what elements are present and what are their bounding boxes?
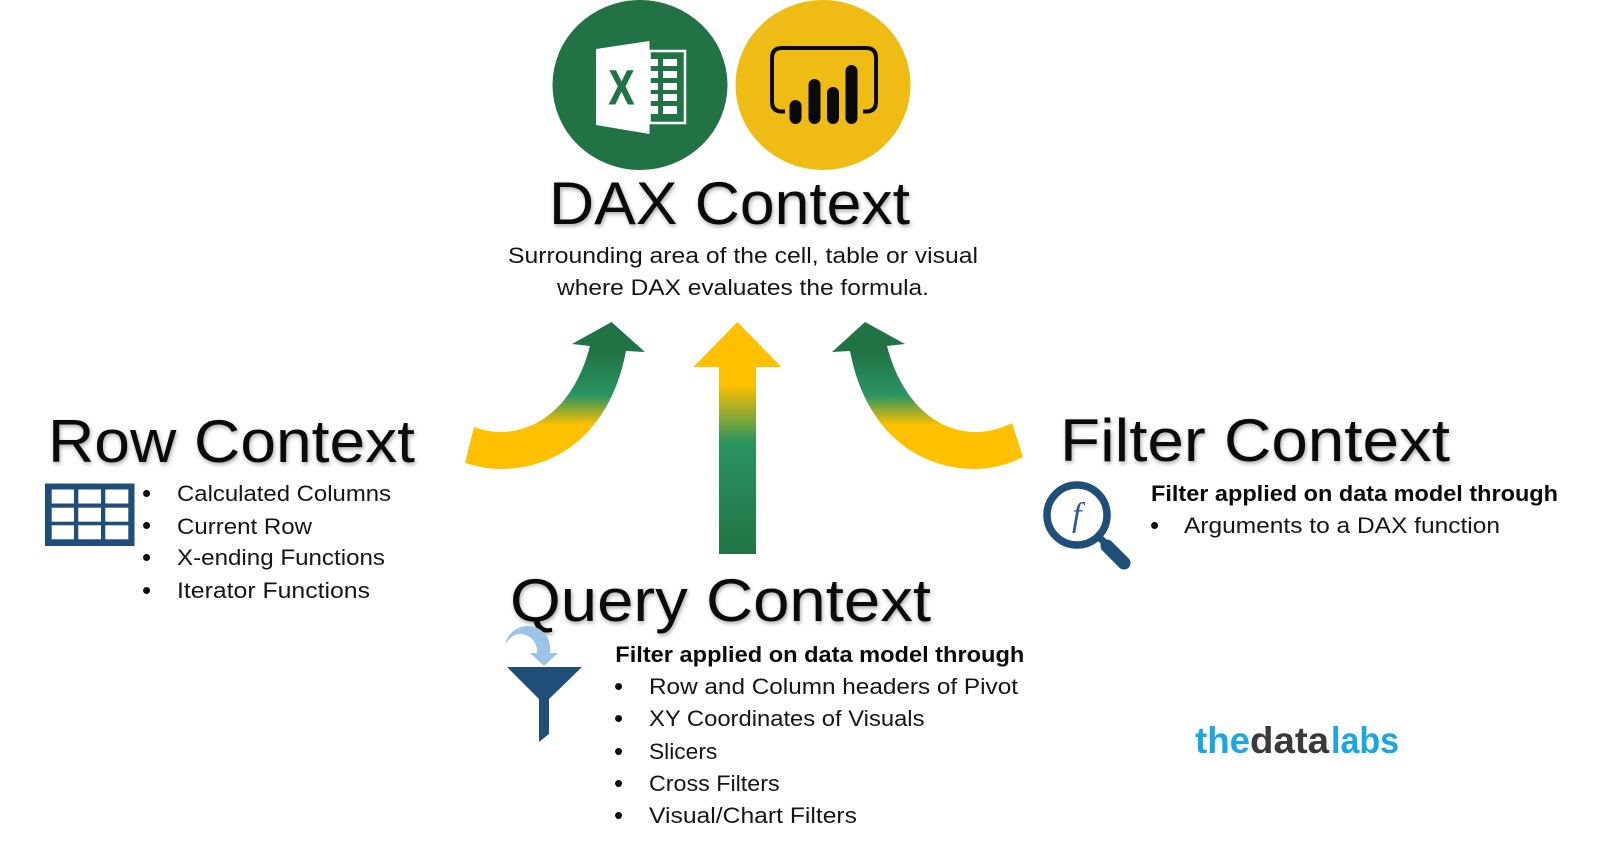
text block: filter context: [1150, 481, 1558, 540]
bullet list: row context: •: [142, 575, 151, 605]
logo: thedatalabs: labs: [1331, 720, 1399, 761]
icon: magnifier with function symbol: f: [1072, 497, 1086, 534]
text block: query context: Filter applied on data model through: [615, 642, 1024, 667]
text block: query context: •: [614, 671, 623, 701]
text block: query context: •: [614, 768, 623, 798]
icon: table: [45, 484, 134, 546]
arrow: query context to DAX context: [693, 322, 781, 554]
bullet list: row context: [142, 478, 391, 605]
text block: filter context: Arguments to a DAX function: [1184, 513, 1500, 538]
text block: query context: XY Coordinates of Visuals: [649, 706, 924, 731]
arrow: filter context to DAX context: [832, 322, 1023, 469]
text block: filter context: Filter applied on data model through: [1151, 481, 1558, 506]
bullet list: row context: •: [142, 478, 151, 508]
bullet list: row context: Iterator Functions: [177, 578, 370, 603]
text block: filter context: •: [1150, 510, 1159, 540]
icon: magnifier with function symbol: [1047, 485, 1124, 563]
logo: thedatalabs: the: [1195, 720, 1250, 761]
bullet list: row context: •: [142, 542, 151, 572]
panel: query context: [505, 567, 1024, 830]
definition text: where DAX evaluates the formula.: [556, 275, 929, 300]
text block: query context: Visual/Chart Filters: [649, 803, 857, 828]
panel: row context: [45, 408, 415, 605]
definition text: [508, 243, 978, 300]
heading: row context: Row Context: [48, 408, 415, 475]
icon: funnel with arrow: [505, 626, 582, 742]
text block: query context: Slicers: [649, 739, 717, 764]
arrow: row context to DAX context: [465, 322, 645, 469]
text block: query context: [614, 642, 1024, 830]
icon: Excel logo: X: [609, 62, 634, 115]
panel: filter context: [1047, 407, 1558, 563]
definition text: Surrounding area of the cell, table or visual: [508, 243, 978, 268]
text block: query context: Row and Column headers of Pivot: [649, 674, 1018, 699]
text block: query context: •: [614, 703, 623, 733]
title: DAX Context: [549, 170, 910, 237]
text block: query context: •: [614, 736, 623, 766]
bullet list: row context: Current Row: [177, 514, 312, 539]
text block: query context: •: [614, 800, 623, 830]
logo: thedatalabs: [1195, 720, 1399, 761]
bullet list: row context: Calculated Columns: [177, 481, 391, 506]
bullet list: row context: •: [142, 510, 151, 540]
heading: query context: Query Context: [510, 567, 931, 634]
logo: thedatalabs: data: [1250, 720, 1329, 761]
bullet list: row context: X-ending Functions: [177, 545, 385, 570]
heading: filter context: Filter Context: [1060, 407, 1450, 474]
icon: Excel logo: [552, 0, 728, 170]
text block: query context: Cross Filters: [649, 771, 780, 796]
icon: Power BI logo: [736, 0, 910, 170]
